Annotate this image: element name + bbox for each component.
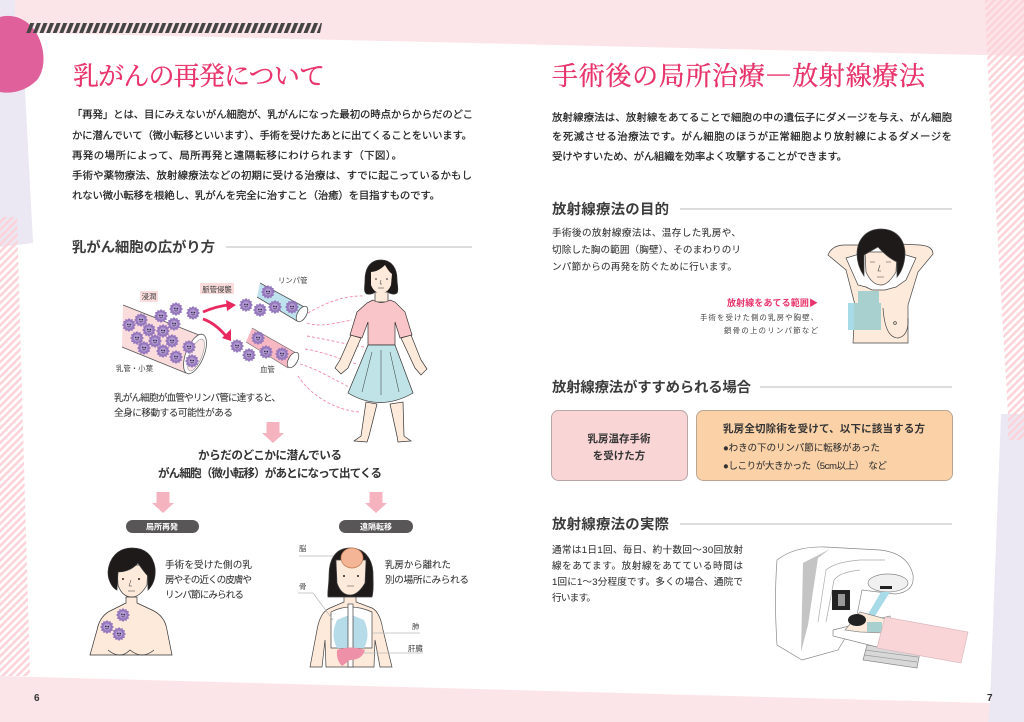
intro text <box>552 111 953 163</box>
irradiated zones <box>858 291 879 303</box>
illustration: radiation machine <box>776 547 968 668</box>
right lavender strip <box>988 414 1024 722</box>
pedestal <box>863 645 920 668</box>
liver <box>337 648 365 666</box>
lymph vessel <box>257 283 310 324</box>
title: breast cancer recurrence: 乳がんの再発について <box>73 56 325 93</box>
caption: spread via vessels: 乳がん細胞が血管やリンパ管に達すると、 <box>114 392 281 404</box>
illustration: distant metastasis figure <box>310 548 392 667</box>
large duct tube <box>122 305 211 377</box>
diagram: duct and cancer cells <box>116 276 310 377</box>
intro text block: 「再発」とは、目にみえないがん細胞が、乳がんになった最初の時点からからだのどこ <box>72 108 473 121</box>
right pink stripes <box>985 0 1024 440</box>
illustration: standing woman <box>335 260 427 442</box>
box: mastectomy <box>696 410 952 480</box>
left page <box>34 56 473 704</box>
illustration: local recurrence figure <box>90 548 172 655</box>
text: distant metastasis: 乳房から離れた <box>385 559 451 571</box>
pill: local recurrence <box>126 520 199 533</box>
diagram labels: 脈管侵襲 <box>202 285 232 294</box>
brain <box>341 548 363 568</box>
box: mastectomy: 乳房全切除術を受けて、以下に該当する方 <box>723 422 925 435</box>
arrow to local recurrence <box>152 492 174 513</box>
lungs <box>334 615 368 648</box>
caption: spread via vessels <box>114 392 281 419</box>
section heading: recommended cases: 放射線療法がすすめられる場合 <box>552 378 752 396</box>
diagram labels: 血管 <box>260 365 275 374</box>
section heading: how cancer cells spread: 乳がん細胞の広がり方 <box>72 238 215 256</box>
diagram labels: 浸潤 <box>142 292 156 301</box>
box: breast conserving: を受けた方 <box>593 449 645 462</box>
text: in practice <box>552 544 743 604</box>
right page <box>552 56 993 704</box>
blood vessel <box>246 328 301 370</box>
rib cage <box>331 607 372 648</box>
text: local recurrence: 房やその近くの皮膚や <box>165 574 252 586</box>
text: purpose: 切除した胸の範囲（胸壁）、そのまわりのリ <box>552 244 741 256</box>
callout: irradiated area: 鎖骨の上のリンパ節など <box>724 326 819 335</box>
callout: irradiated area: 放射線をあてる範囲▶ <box>727 297 818 308</box>
center message <box>158 448 382 480</box>
center message: からだのどこかに潜んでいる <box>198 448 342 462</box>
pill: local recurrence: 局所再発 <box>146 522 178 532</box>
box: mastectomy: ●わきの下のリンパ節に転移があった <box>723 442 880 454</box>
box: mastectomy: ●しこりが大きかった（5cm以上） など <box>723 460 887 472</box>
section heading: in practice: 放射線療法の実際 <box>552 515 670 533</box>
caption: spread via vessels: 全身に移動する可能性がある <box>114 407 233 419</box>
intro text block <box>72 108 473 202</box>
illustration: woman with raised arms <box>828 229 933 343</box>
patient <box>845 612 890 633</box>
organ labels: 肺 <box>412 622 420 631</box>
callout: irradiated area: 手術を受けた側の乳房や胸壁、 <box>700 313 818 322</box>
intro text block: かに潜んでいて（微小転移といいます）、手術を受けたあとに出てくることをいいます。 <box>72 129 472 142</box>
pill: distant metastasis <box>339 520 413 533</box>
treatment head <box>868 574 908 592</box>
red arrows <box>203 300 236 341</box>
box: breast conserving <box>552 410 688 480</box>
text: purpose <box>552 227 741 273</box>
top hatch band <box>26 23 322 33</box>
left pink blob <box>0 16 44 93</box>
beam <box>867 592 890 616</box>
intro text block: 再発の場所によって、局所再発と遠隔転移にわけられます（下図）。 <box>72 149 402 162</box>
page number 7: 7 <box>987 693 993 704</box>
spine <box>348 604 353 667</box>
imaging panel <box>832 590 850 610</box>
cancer cells <box>122 285 299 368</box>
text: local recurrence: リンパ節にみられる <box>165 589 244 601</box>
text: purpose: 手術後の放射線療法は、温存した乳房や、 <box>552 227 741 239</box>
arrow to distant metastasis <box>365 492 387 513</box>
diagram labels: 乳管・小葉 <box>116 364 154 373</box>
text: local recurrence <box>165 559 252 601</box>
intro text: を死滅させる治療法です。がん細胞のほうが正常細胞より放射線によるダメージを <box>552 130 952 143</box>
text: in practice: 通常は1日1回、毎日、約十数回〜30回放射 <box>552 544 743 556</box>
dashed arrows to body <box>298 296 365 412</box>
intro text: 放射線療法は、放射線をあてることで細胞の中の遺伝子にダメージを与え、がん細胞 <box>552 111 953 124</box>
text: in practice: 線をあてます。放射線をあてている時間は <box>552 560 743 572</box>
page number 6: 6 <box>34 693 40 704</box>
diagram labels <box>116 276 308 374</box>
text: in practice: 行います。 <box>552 592 596 604</box>
title: radiation therapy: 手術後の局所治療―放射線療法 <box>552 56 926 93</box>
organ labels: 脳 <box>299 544 307 553</box>
blanket <box>877 617 968 663</box>
diagram labels: リンパ管 <box>278 276 308 285</box>
text: in practice: 1回に1〜3分程度です。多くの場合、通院で <box>552 576 743 588</box>
gantry <box>776 547 913 660</box>
left pink stripes <box>0 217 30 676</box>
box: breast conserving: 乳房温存手術 <box>588 432 651 445</box>
pill: distant metastasis: 遠隔転移 <box>360 522 392 532</box>
text: distant metastasis: 別の場所にみられる <box>385 574 469 586</box>
left lavender strip <box>0 0 33 247</box>
text: local recurrence: 手術を受けた側の乳 <box>165 559 252 571</box>
arrow down <box>262 422 284 443</box>
intro text block: 手術や薬物療法、放射線療法などの初期に受ける治療は、すでに起こっているかもし <box>72 169 472 182</box>
section heading: purpose: 放射線療法の目的 <box>552 200 669 218</box>
intro text: 受けやすいため、がん組織を効率よく攻撃することができます。 <box>552 150 847 163</box>
callout: irradiated area <box>700 297 819 335</box>
organ labels <box>298 544 423 653</box>
text: distant metastasis <box>385 559 469 586</box>
couch <box>833 616 895 647</box>
center message: がん細胞（微小転移）があとになって出てくる <box>158 466 382 480</box>
organ labels: 肝臓 <box>408 644 423 653</box>
text: purpose: ンパ節からの再発を防ぐために行います。 <box>552 261 737 273</box>
organ labels: 骨 <box>299 582 306 591</box>
intro text block: れない微小転移を根絶し、乳がんを完全に治すこと（治癒）を目指すものです。 <box>72 189 440 202</box>
